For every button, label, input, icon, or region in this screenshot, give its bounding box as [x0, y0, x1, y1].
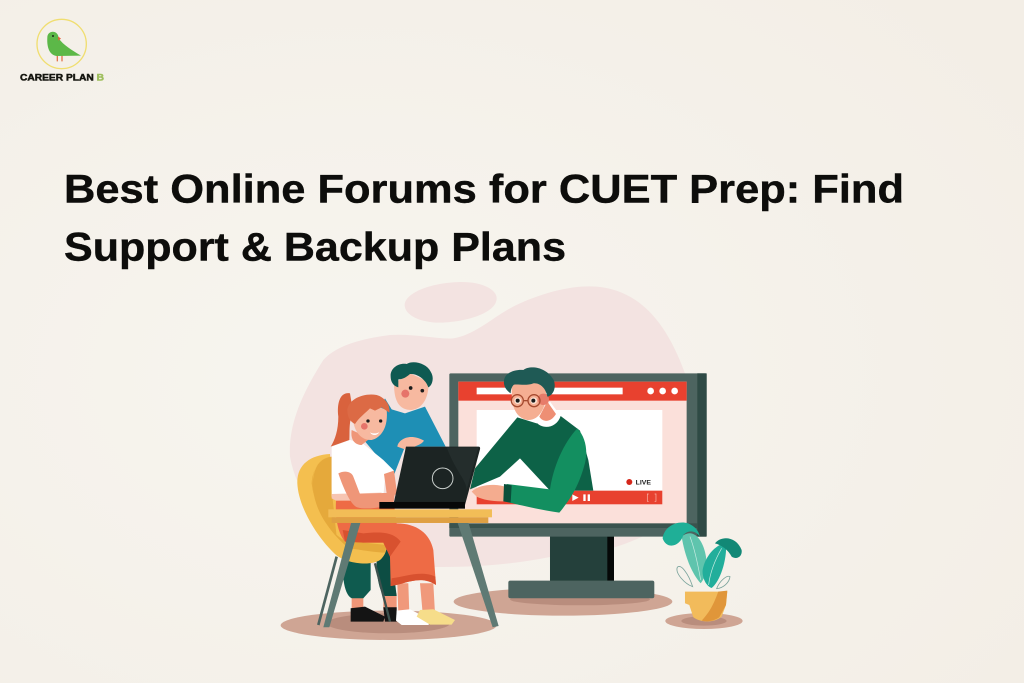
monitor frame: [449, 373, 707, 537]
arm: [338, 472, 395, 508]
skirt: [336, 500, 436, 586]
chair: [297, 454, 387, 563]
icon: bird in circle: [37, 19, 86, 69]
torso: [332, 440, 394, 497]
girl: [331, 393, 436, 586]
desk: [318, 509, 499, 627]
video area: [477, 410, 662, 504]
plant: [663, 522, 743, 629]
screen: [458, 382, 687, 523]
background blobs: [290, 282, 693, 570]
monitor: [449, 367, 707, 616]
leaves: [677, 566, 730, 589]
browser bar: [458, 382, 687, 401]
pot: [685, 592, 727, 621]
boy in blue: [363, 362, 446, 477]
monitor stand: [550, 535, 614, 582]
title: Best Online Forums for CUET Prep: Find: [64, 168, 904, 212]
monitor shadow: [454, 588, 672, 616]
title: [64, 168, 904, 270]
title: Support & Backup Plans: [64, 226, 566, 270]
neck and head: [351, 430, 370, 445]
ponytail: [331, 393, 353, 447]
illustration: students watching an online class: [281, 282, 743, 640]
girl's legs and shoes: [343, 547, 455, 625]
live badge: LIVE: [636, 479, 652, 486]
plant shadow: [665, 613, 743, 629]
live badge: [626, 479, 652, 486]
desk shadow: [281, 611, 497, 640]
laptop: [379, 447, 480, 509]
brand name: CAREER PLAN B: [20, 72, 104, 84]
logo: Career Plan B: [20, 19, 104, 84]
students at desk: [281, 362, 499, 640]
video control bar: [477, 491, 662, 504]
presenter: [470, 367, 593, 513]
